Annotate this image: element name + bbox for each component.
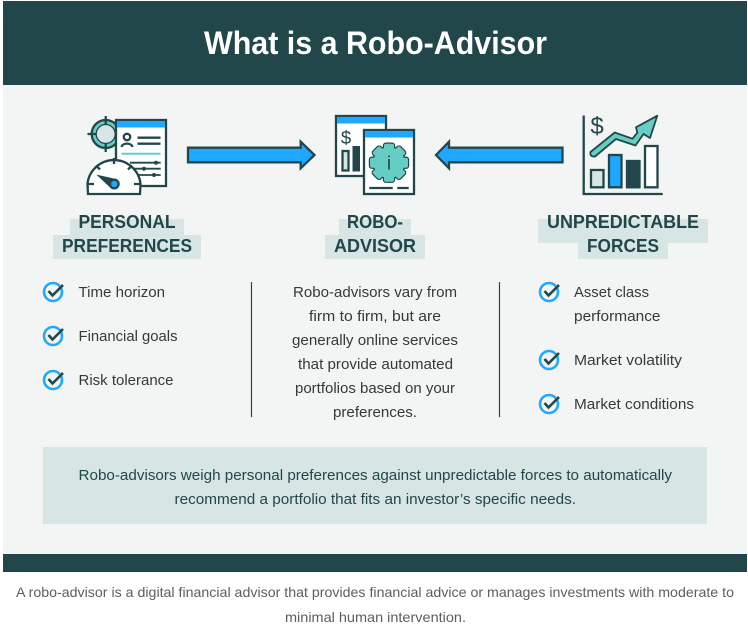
callout: summary xyxy=(43,447,707,524)
icon: robo-advisor documents xyxy=(336,116,414,194)
caption: minimal human intervention. xyxy=(285,609,466,625)
item: market conditions: Market conditions xyxy=(574,396,694,413)
text block: robo-advisor description: portfolios based on your xyxy=(295,380,455,397)
heading: unpredictable forces: UNPREDICTABLE xyxy=(547,211,699,232)
heading: unpredictable forces: FORCES xyxy=(587,235,659,256)
title banner xyxy=(3,1,747,85)
icon: market chart xyxy=(584,113,663,194)
heading: robo-advisor: ADVISOR xyxy=(334,235,416,256)
arrow: preferences to robo-advisor xyxy=(188,142,314,168)
icon: gauge xyxy=(88,158,140,194)
caption xyxy=(16,584,734,625)
text block: robo-advisor description: Robo-advisors vary from xyxy=(293,284,457,301)
icon: market chart: $ xyxy=(590,113,604,140)
title banner: What is a Robo-Advisor xyxy=(204,25,547,61)
item: financial goals: Financial goals xyxy=(78,328,178,345)
icon: target xyxy=(88,116,123,152)
heading: personal preferences xyxy=(53,211,201,259)
heading: robo-advisor xyxy=(325,211,425,259)
icon: front document with gear: i xyxy=(387,154,391,175)
checklist: personal preferences xyxy=(44,283,178,389)
item: asset class performance: performance xyxy=(574,308,660,325)
icon: back report: $ xyxy=(341,127,351,148)
item: asset class performance xyxy=(540,283,660,325)
checklist: unpredictable forces xyxy=(540,283,694,413)
heading: unpredictable forces xyxy=(538,211,708,259)
icon: trend arrow xyxy=(590,116,657,157)
item: market volatility: Market volatility xyxy=(574,352,683,369)
heading: personal preferences: PERSONAL xyxy=(78,211,176,232)
text block: robo-advisor description: generally online services xyxy=(292,332,458,349)
text block: robo-advisor description xyxy=(292,284,458,421)
callout: summary: recommend a portfolio that fits an investor’s specific needs. xyxy=(174,491,576,508)
text block: robo-advisor description: that provide automated xyxy=(298,356,453,373)
item: market volatility xyxy=(540,351,683,369)
text block: robo-advisor description: preferences. xyxy=(333,404,417,421)
item: time horizon: Time horizon xyxy=(78,284,165,301)
arrow: forces to robo-advisor xyxy=(436,142,562,168)
callout: summary: Robo-advisors weigh personal preferences against unpredictable forces to automatically xyxy=(78,467,673,484)
caption: A robo-advisor is a digital financial advisor that provides financial advice or manages investments with moderate to xyxy=(16,584,734,600)
icon: personal preferences xyxy=(88,116,166,194)
icon: profile document xyxy=(116,120,166,186)
item: asset class performance: Asset class xyxy=(574,284,649,301)
item: risk tolerance: Risk tolerance xyxy=(78,372,174,389)
text block: robo-advisor description: firm to firm, but are xyxy=(309,308,441,325)
footer band xyxy=(3,554,747,572)
heading: personal preferences: PREFERENCES xyxy=(62,235,192,256)
heading: robo-advisor: ROBO- xyxy=(347,211,403,232)
